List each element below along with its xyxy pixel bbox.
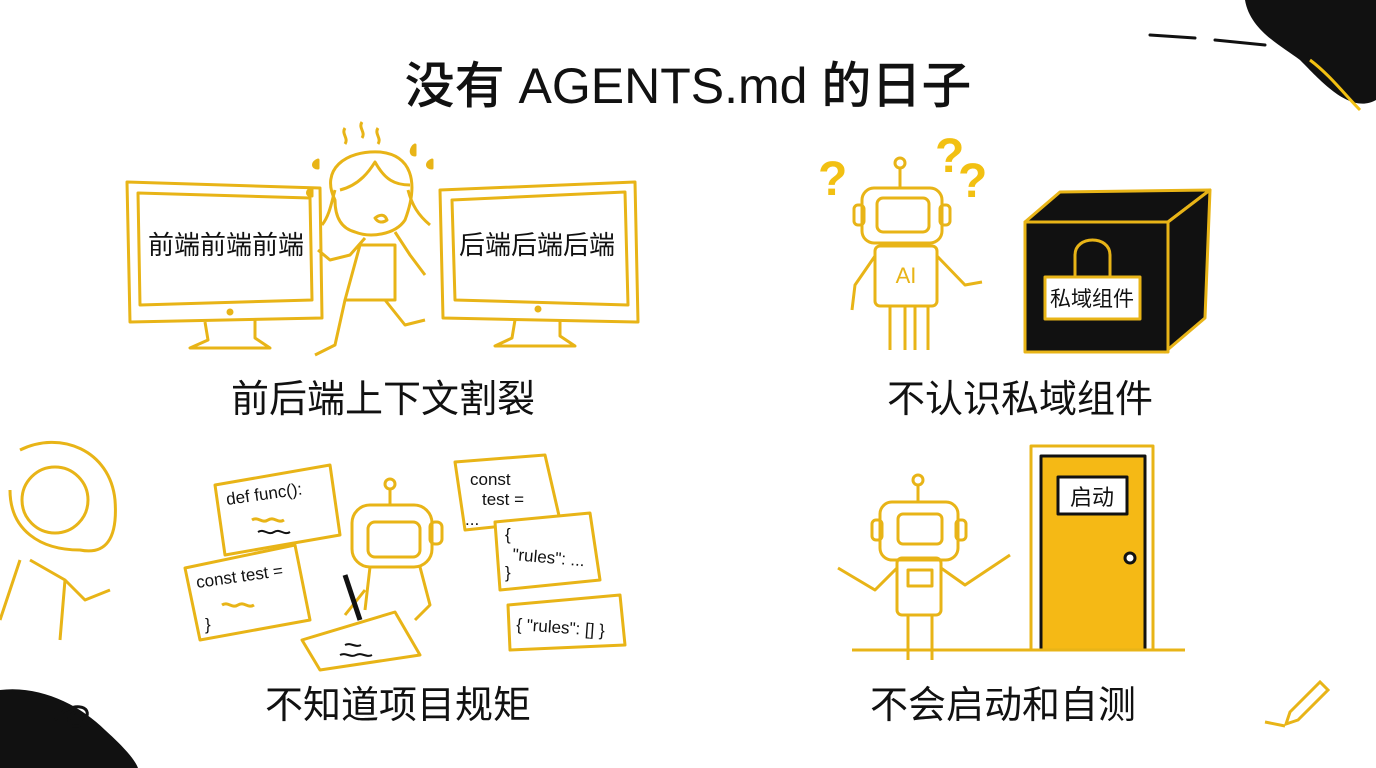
icon: waving girl — [0, 442, 115, 640]
icon: code papers: def func(): — [225, 479, 303, 509]
icon: code papers: test = — [482, 490, 524, 509]
panel: frontend/backend split — [127, 122, 638, 355]
icon: code papers: } — [505, 563, 511, 582]
icon: question marks: ? — [818, 153, 847, 206]
icon: code papers: const — [470, 470, 511, 489]
panel: startup and self-test — [838, 446, 1185, 660]
floor line — [852, 648, 1185, 652]
icon: left monitor — [127, 182, 322, 348]
text: monitor labels: 前端前端前端 — [148, 230, 304, 260]
panel: frontend/backend split: 后端后端后端 — [459, 230, 615, 260]
blob: bottom left — [0, 689, 138, 768]
icon: stressed girl — [308, 122, 432, 355]
icon: code papers: { — [505, 525, 511, 544]
caption: private components: 不认识私域组件 — [887, 379, 1153, 421]
icon: black box with lock — [1025, 190, 1210, 352]
icon: door — [1031, 446, 1153, 650]
caption: rules: 不知道项目规矩 — [265, 685, 531, 727]
icon: door: 启动 — [1070, 485, 1114, 510]
icon: code papers — [185, 455, 625, 670]
icon: question marks — [818, 130, 987, 208]
icon: right monitor — [440, 182, 638, 346]
panel: project rules — [0, 442, 625, 670]
icon: shrugging robot — [838, 475, 1010, 660]
icon: code papers: { "rules": [] } — [516, 615, 606, 640]
icon: question marks: ? — [958, 155, 987, 208]
icon: pencil — [1265, 682, 1328, 726]
icon: writing robot — [345, 479, 442, 620]
caption: split: 前后端上下文割裂 — [231, 379, 535, 421]
blob: top right — [1150, 0, 1376, 110]
caption: startup: 不会启动和自测 — [870, 685, 1136, 727]
icon: AI robot — [852, 158, 982, 350]
icon: black box with lock: 私域组件 — [1050, 288, 1134, 311]
title: 没有 AGENTS.md 的日子 — [405, 58, 971, 114]
icon: code papers: "rules": ... — [512, 545, 586, 570]
icon: code papers: const test = — [195, 561, 284, 592]
icon: code papers: ... — [465, 510, 479, 529]
icon: AI robot: AI — [896, 263, 916, 288]
icon: code papers: } — [205, 615, 211, 634]
icon: question marks: ? — [935, 130, 964, 183]
panel: private components — [818, 130, 1210, 352]
